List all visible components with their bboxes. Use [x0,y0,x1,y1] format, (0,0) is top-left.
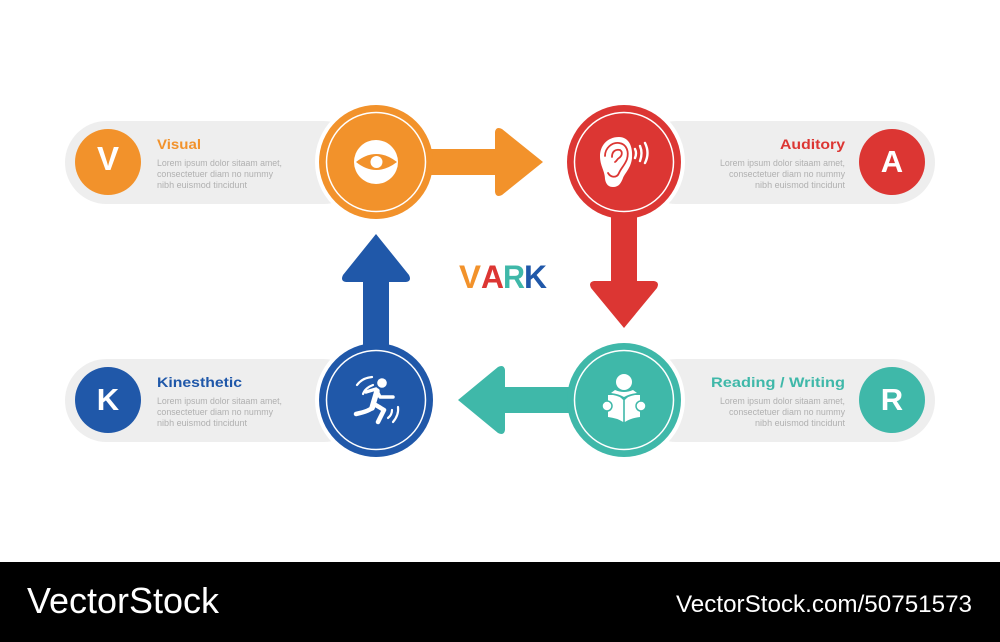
panel: Reading / Writing [635,359,935,442]
badge: K [75,367,141,433]
title: VARK [459,259,547,295]
heading: Visual: Visual [157,136,201,152]
text: Auditory description: consectetuer diam no nummy [729,169,845,179]
panel: Kinesthetic [65,359,365,442]
node: teal reading [567,343,681,457]
badge: K: K [97,382,120,417]
arrow: red down [590,210,658,328]
text: Reading description [720,396,845,428]
title: VARK: A [481,259,504,295]
node: orange visual [319,105,433,219]
badge: A [859,129,925,195]
text: Kinesthetic description [157,396,282,428]
badge: R: R [881,382,903,417]
heading: Auditory: Auditory [780,136,845,152]
arrow: blue up [342,234,410,350]
title: VARK: R [503,259,525,295]
node: blue kinesthetic [319,343,433,457]
panel: Auditory [635,121,935,204]
text: Kinesthetic description: nibh euismod tincidunt [157,418,247,428]
badge: V: V [97,140,119,177]
node: red auditory [567,105,681,219]
text: Visual description: nibh euismod tincidunt [157,180,247,190]
heading: Reading / Writing: Reading / Writing [711,374,845,390]
text: Auditory description [720,158,845,190]
text: Reading description: consectetuer diam no nummy [729,407,845,417]
text: Auditory description: Lorem ipsum dolor sitaam amet, [720,158,845,168]
footer bar [0,562,1000,642]
title: VARK: K [524,259,547,295]
text: Kinesthetic description: Lorem ipsum dolor sitaam amet, [157,396,282,406]
icon: reader with book [602,374,646,422]
text: Reading description: Lorem ipsum dolor sitaam amet, [720,396,845,406]
panel: Visual [65,121,365,204]
text: Visual description: consectetuer diam no nummy [157,169,273,179]
white halos behind nodes [315,101,685,461]
text: Reading description: nibh euismod tincidunt [755,418,845,428]
footer logo: VectorStock [27,580,220,621]
text: Auditory description: nibh euismod tincidunt [755,180,845,190]
arrow: orange right [420,128,543,196]
text: Visual description: Lorem ipsum dolor sitaam amet, [157,158,282,168]
text: Kinesthetic description: consectetuer diam no nummy [157,407,273,417]
heading: Kinesthetic: Kinesthetic [157,374,242,390]
footer id: VectorStock.com/50751573 [676,591,972,618]
icon: ear [600,137,648,187]
text: Visual description [157,158,282,190]
title: VARK: V [459,259,482,295]
icon: eye [354,140,398,184]
badge: A: A [881,144,903,179]
badge: R [859,367,925,433]
icon: running figure [356,377,398,422]
arrow: teal left [458,366,580,434]
badge: V [75,129,141,195]
